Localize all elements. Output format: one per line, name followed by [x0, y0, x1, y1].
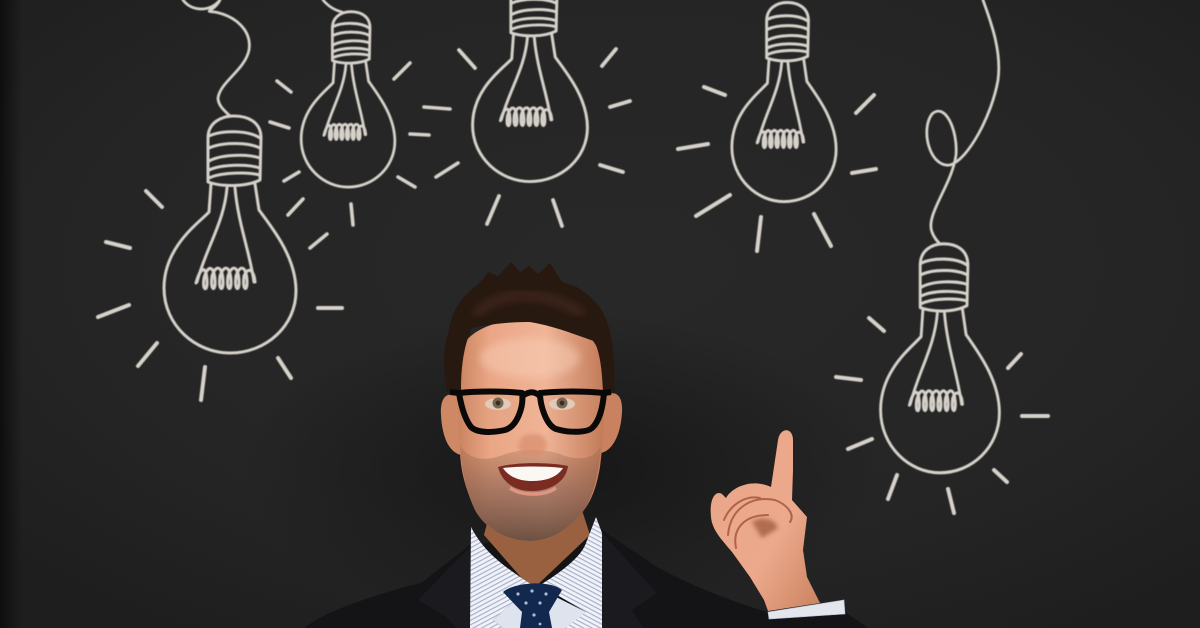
tie with dots — [503, 583, 562, 628]
bulb 4: top right — [678, 3, 876, 251]
eyes — [485, 398, 575, 410]
mouth — [498, 463, 568, 494]
forehead highlight — [480, 338, 580, 378]
shirt collar — [470, 517, 602, 628]
jacket lapels — [418, 533, 657, 628]
bulb 5: right with looped wire — [836, 0, 1048, 513]
glasses — [450, 392, 611, 432]
pointing hand — [711, 430, 820, 611]
ears — [441, 393, 622, 455]
suit jacket — [305, 530, 868, 628]
man — [305, 262, 868, 628]
face — [458, 318, 604, 541]
chalk drawings — [98, 0, 1048, 513]
shirt cuff — [768, 600, 845, 619]
hair — [444, 262, 615, 392]
bulb 3: top centre — [459, 0, 630, 226]
nose — [519, 434, 547, 456]
bulb 2: upper left small — [270, 0, 458, 248]
bulb 1: left with wire — [98, 0, 342, 400]
neck — [484, 510, 590, 590]
stubble — [460, 445, 601, 541]
